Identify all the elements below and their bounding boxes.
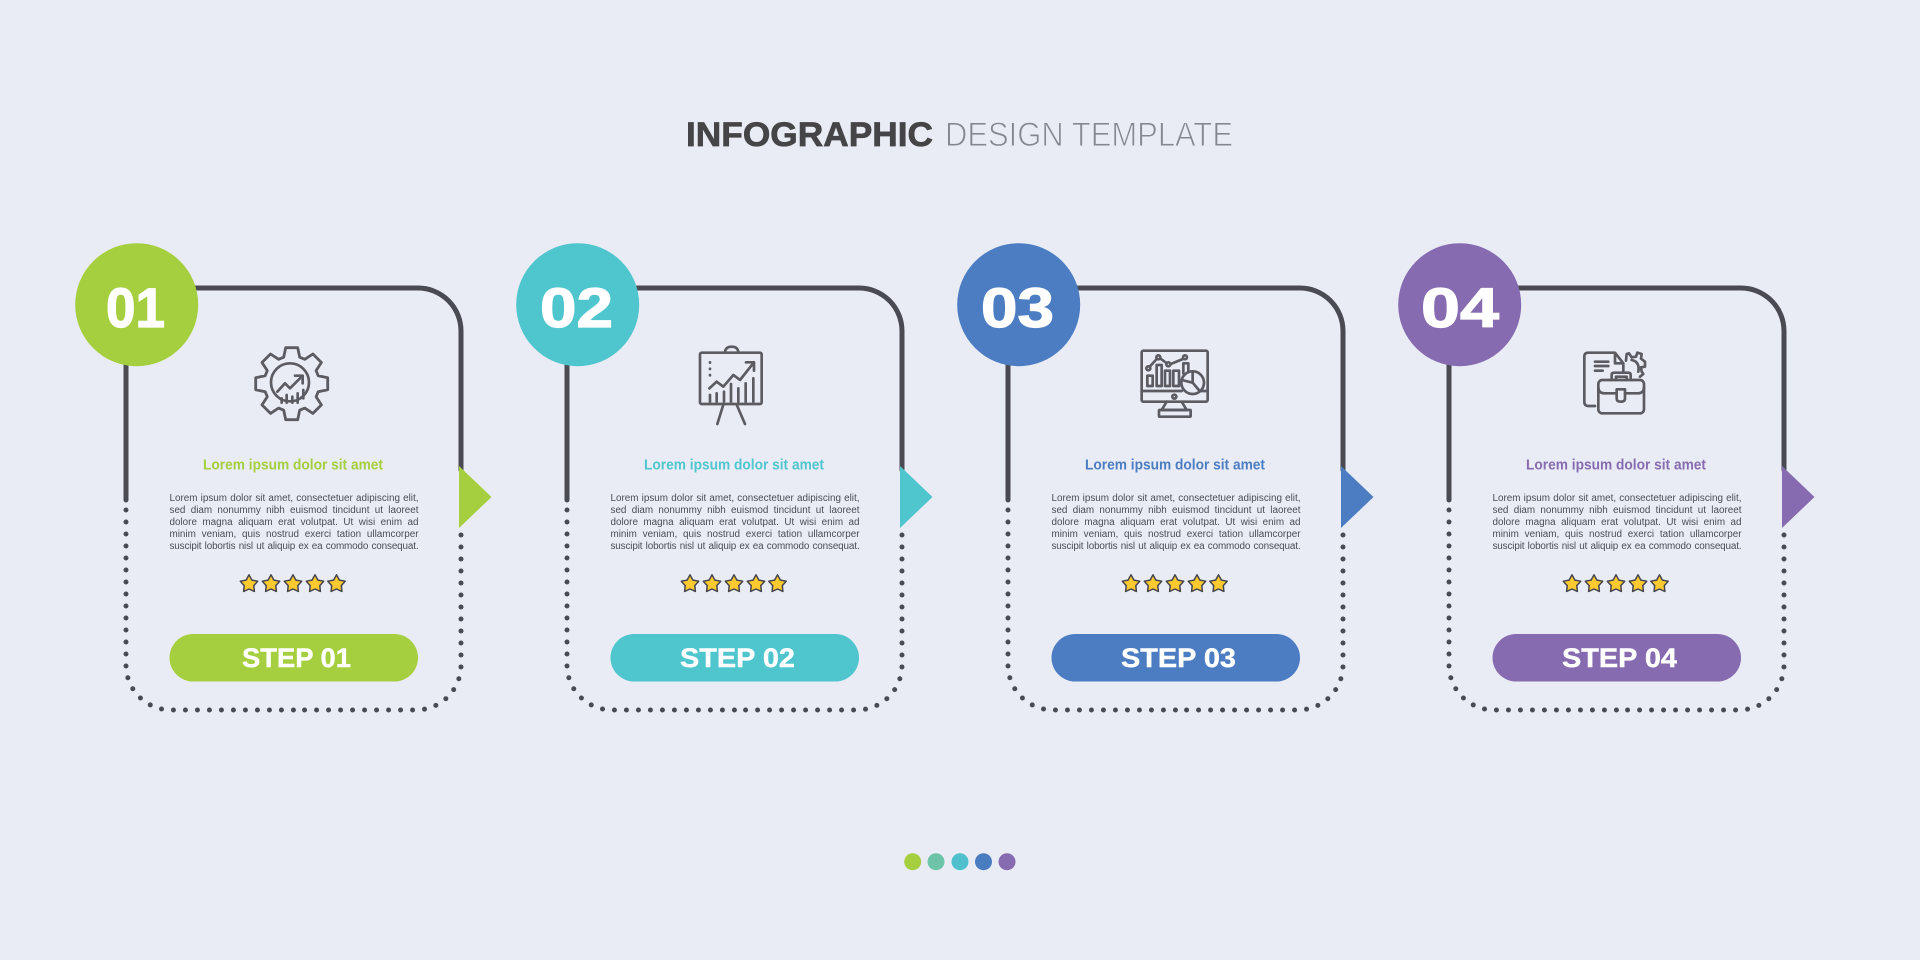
title <box>686 116 1233 154</box>
step button: STEP 02 <box>680 643 795 673</box>
body text <box>610 493 860 555</box>
number badge: 01 <box>106 276 165 339</box>
body text <box>1052 493 1300 555</box>
body text <box>170 493 418 555</box>
number badge: 03 <box>981 276 1054 339</box>
number badge <box>516 243 639 366</box>
step button <box>170 634 418 682</box>
body text: sed diam nonummy nibh euismod tincidunt ut laoreet <box>1052 505 1300 516</box>
body text: sed diam nonummy nibh euismod tincidunt ut laoreet <box>1492 505 1742 516</box>
body text: suscipit lobortis nisl ut aliquip ex ea commodo consequat. <box>1052 541 1300 552</box>
pagination dots <box>904 853 1016 870</box>
icon: document, gear and briefcase <box>1584 353 1645 413</box>
step button: STEP 01 <box>242 643 351 673</box>
card frame <box>567 288 902 710</box>
body text: minim veniam, quis nostrud exerci tation ullamcorper <box>170 529 418 540</box>
step button <box>1492 634 1741 682</box>
title: INFOGRAPHIC <box>686 116 933 154</box>
panel: step 03 <box>957 243 1374 710</box>
icon: presentation board <box>700 347 762 424</box>
title: DESIGN TEMPLATE <box>945 116 1233 154</box>
card frame <box>126 288 461 710</box>
star rating <box>1122 575 1227 591</box>
step button: STEP 03 <box>1121 643 1236 673</box>
arrow <box>1341 466 1374 528</box>
body text: Lorem ipsum dolor sit amet, consectetuer adipiscing elit, <box>1492 493 1742 504</box>
panel: step 02 <box>516 243 932 710</box>
arrow <box>1782 466 1814 528</box>
body text: minim veniam, quis nostrud exerci tation ullamcorper <box>610 529 860 540</box>
body text: dolore magna aliquam erat volutpat. Ut wisi enim ad <box>1492 517 1742 528</box>
body text: minim veniam, quis nostrud exerci tation ullamcorper <box>1492 529 1742 540</box>
number badge: 02 <box>540 276 613 339</box>
number badge: 04 <box>1421 276 1499 339</box>
star rating <box>681 575 786 591</box>
panel: step 04 <box>1398 243 1814 710</box>
body text: suscipit lobortis nisl ut aliquip ex ea commodo consequat. <box>610 541 860 552</box>
number badge <box>1398 243 1521 366</box>
body text: Lorem ipsum dolor sit amet, consectetuer adipiscing elit, <box>610 493 860 504</box>
body text: sed diam nonummy nibh euismod tincidunt ut laoreet <box>170 505 418 516</box>
card frame <box>1008 288 1343 710</box>
body text: dolore magna aliquam erat volutpat. Ut wisi enim ad <box>1052 517 1300 528</box>
number badge <box>957 243 1080 366</box>
step button: STEP 04 <box>1562 643 1677 673</box>
subheading: Lorem ipsum dolor sit amet <box>1085 458 1265 474</box>
body text: Lorem ipsum dolor sit amet, consectetuer adipiscing elit, <box>170 493 418 504</box>
subheading: Lorem ipsum dolor sit amet <box>1526 458 1706 474</box>
subheading: Lorem ipsum dolor sit amet <box>644 458 824 474</box>
panel: step 01 <box>75 243 491 710</box>
body text: dolore magna aliquam erat volutpat. Ut wisi enim ad <box>610 517 860 528</box>
body text: suscipit lobortis nisl ut aliquip ex ea commodo consequat. <box>1492 541 1742 552</box>
body text: suscipit lobortis nisl ut aliquip ex ea commodo consequat. <box>170 541 418 552</box>
step button <box>610 634 859 682</box>
body text: sed diam nonummy nibh euismod tincidunt ut laoreet <box>610 505 860 516</box>
card frame <box>1449 288 1784 710</box>
icon: monitor with charts <box>1142 351 1208 417</box>
star rating <box>240 575 345 591</box>
star rating <box>1563 575 1668 591</box>
body text <box>1492 493 1742 555</box>
step button <box>1052 634 1300 682</box>
icon: gear with growth chart <box>256 348 328 420</box>
arrow <box>900 466 932 528</box>
body text: Lorem ipsum dolor sit amet, consectetuer adipiscing elit, <box>1052 493 1300 504</box>
arrow <box>459 466 492 528</box>
body text: dolore magna aliquam erat volutpat. Ut wisi enim ad <box>170 517 418 528</box>
body text: minim veniam, quis nostrud exerci tation ullamcorper <box>1052 529 1300 540</box>
number badge <box>75 243 198 366</box>
subheading: Lorem ipsum dolor sit amet <box>203 458 383 474</box>
